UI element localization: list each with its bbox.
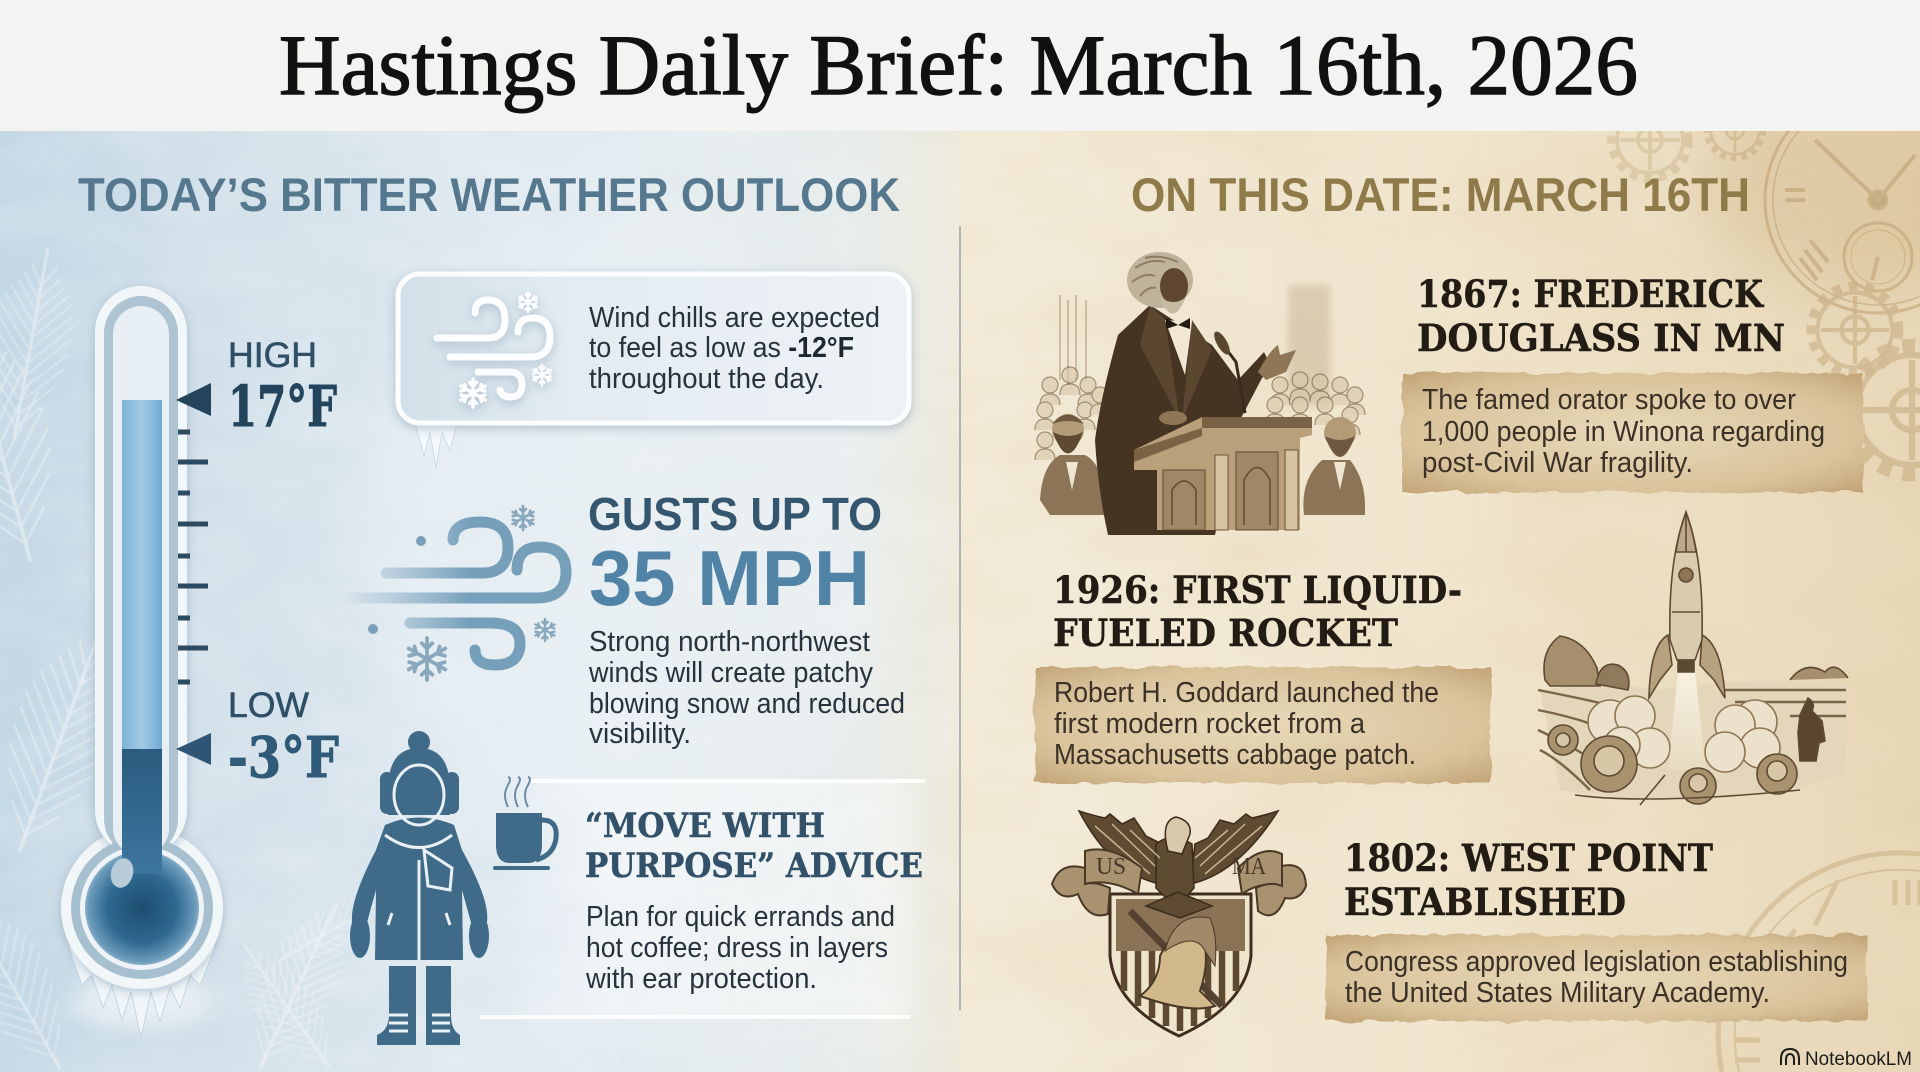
gusts heading: GUSTS UP TO <box>588 488 882 540</box>
motto: MA: MA <box>1232 854 1267 880</box>
event: 1926 <box>1035 568 1491 783</box>
advice heading: “MOVE WITH <box>585 806 825 846</box>
title: Hastings Daily Brief: March 16th, 2026 <box>279 17 1638 113</box>
event: 1867 <box>1402 272 1863 492</box>
crowd <box>1035 367 1365 460</box>
podium <box>1134 417 1312 530</box>
advice heading <box>585 806 923 886</box>
icon: coffee cup <box>493 777 556 870</box>
frost crystals background <box>0 246 376 1070</box>
event: 1867: post-Civil War fragility. <box>1422 447 1693 479</box>
cabbages <box>1548 725 1797 804</box>
icon: wind and snow <box>437 292 551 407</box>
trees <box>1544 636 1600 686</box>
heading: on this date: ON THIS DATE: MARCH 16TH <box>1131 168 1750 221</box>
shield <box>1110 894 1251 1036</box>
gusts text: visibility. <box>589 718 691 750</box>
callout text: to feel as low as -12°F <box>589 332 854 364</box>
event: 1926: first modern rocket from a <box>1054 708 1366 740</box>
scroll banners <box>1052 849 1306 915</box>
divider <box>959 226 961 1010</box>
illustration: Frederick Douglass speaking <box>1035 252 1365 535</box>
event: 1802 <box>1326 836 1867 1021</box>
event: 1802: Congress approved legislation establishing <box>1345 946 1848 978</box>
illustration: West Point seal <box>1052 811 1306 1036</box>
event: 1926: FUELED ROCKET <box>1053 611 1398 655</box>
rocket <box>1649 635 1725 698</box>
high temperature: 17°F <box>228 374 337 440</box>
sword and helmet <box>1130 911 1222 1006</box>
callout text: throughout the day. <box>589 363 824 395</box>
advice text: hot coffee; dress in layers <box>586 932 888 964</box>
event: 1926: Massachusetts cabbage patch. <box>1054 739 1416 771</box>
event: 1802: the United States Military Academy. <box>1345 977 1770 1009</box>
icicles <box>68 945 216 1037</box>
panel: weather outlook <box>61 168 935 1045</box>
callout text: Wind chills are expected <box>589 302 880 334</box>
advice heading: PURPOSE” ADVICE <box>585 846 923 886</box>
gusts text: winds will create patchy <box>588 657 873 689</box>
event: 1802: 1802: WEST POINT <box>1344 836 1713 880</box>
icon: bundled person <box>350 731 489 1045</box>
tick marks <box>178 432 208 682</box>
icicles under callout <box>414 420 458 468</box>
illustration: rocket launch in cabbage patch <box>1538 512 1848 805</box>
motto: US: US <box>1096 854 1126 880</box>
speaker head <box>1127 252 1193 308</box>
callout: wind chill <box>398 274 909 468</box>
event: 1867: 1867: FREDERICK <box>1417 272 1765 316</box>
gusts text: blowing snow and reduced <box>589 688 905 720</box>
seated man right <box>1303 417 1365 515</box>
gusts heading <box>588 488 882 622</box>
gusts text: Strong north-northwest <box>589 626 870 658</box>
advice text <box>585 901 895 995</box>
advice text: with ear protection. <box>585 963 817 995</box>
title bar <box>0 0 1920 131</box>
speaker body <box>1095 305 1272 535</box>
high temperature: HIGH <box>228 336 317 375</box>
eagle <box>1079 811 1278 918</box>
low temperature: -3°F <box>228 725 339 791</box>
seated man left <box>1040 414 1106 515</box>
low temperature <box>228 686 339 791</box>
high temperature <box>228 336 337 440</box>
callout text <box>589 302 880 395</box>
notebooklm badge: NotebookLM <box>1805 1049 1912 1070</box>
event: 1926: 1926: FIRST LIQUID- <box>1053 568 1462 612</box>
decorative clocks and gears <box>1612 87 1920 1072</box>
high arrow <box>176 383 211 416</box>
event: 1802: ESTABLISHED <box>1344 880 1626 924</box>
microphone <box>1217 337 1245 413</box>
advice text: Plan for quick errands and <box>586 901 895 933</box>
low temperature: LOW <box>228 686 309 725</box>
panel: on this date <box>1035 168 1867 1036</box>
event: 1867: The famed orator spoke to over <box>1422 384 1796 416</box>
gusts heading: 35 MPH <box>589 534 870 622</box>
thermometer <box>61 286 223 1037</box>
event: 1926: Robert H. Goddard launched the <box>1054 677 1439 709</box>
event: 1867: DOUGLASS IN MN <box>1417 316 1785 360</box>
exhaust clouds <box>1588 696 1780 772</box>
low arrow <box>176 733 211 765</box>
event: 1867: 1,000 people in Winona regarding <box>1422 416 1825 448</box>
man watching <box>1798 698 1825 761</box>
gusts text <box>588 626 905 750</box>
panel: advice <box>350 731 935 1045</box>
heading: weather outlook: TODAY’S BITTER WEATHER OUTLOOK <box>78 168 900 221</box>
icon: large wind <box>343 506 566 680</box>
field <box>1540 681 1848 800</box>
